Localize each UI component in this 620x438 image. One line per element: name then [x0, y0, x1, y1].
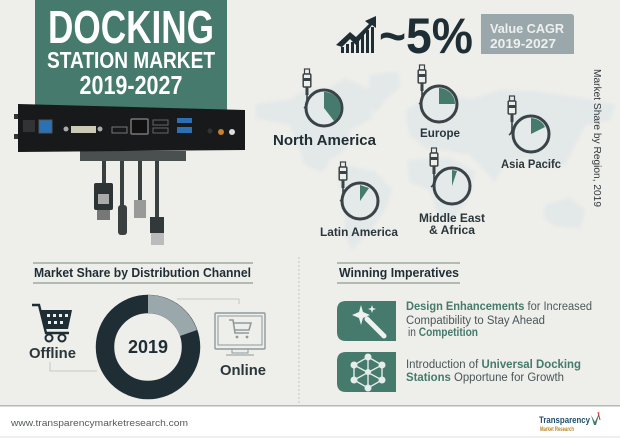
- CAGR label box: 2019-2027: [490, 37, 556, 51]
- text: design enhancements: in Competition: [408, 327, 478, 339]
- vertical dotted divider: [298, 257, 300, 403]
- CAGR label box: Value CAGR: [490, 22, 564, 36]
- heading: winning imperatives: [337, 263, 460, 283]
- website url: www.transparencymarketresearch.com: [10, 418, 188, 429]
- docking station device: [14, 104, 245, 161]
- icon tile: magic wand: [337, 301, 396, 341]
- North America pie: [273, 69, 377, 149]
- title: years: 2019-2027: [80, 70, 182, 100]
- logo: Transparency Market Research: [539, 411, 600, 433]
- connector cables: [94, 161, 164, 245]
- label: Asia Pacifc: [501, 157, 561, 171]
- Europe pie: [418, 65, 460, 140]
- leader lines: [50, 299, 239, 371]
- title: Station Market: STATION MARKET: [47, 47, 215, 73]
- text: design enhancements: Compatibility to Stay Ahead: [406, 315, 545, 327]
- side label: market share by region: Market Share by Region, 2019: [591, 69, 603, 207]
- CAGR label box: [481, 14, 574, 54]
- Asia Pacific pie: [501, 96, 561, 171]
- heading: distribution channel: Market Share by Distribution Channel: [34, 266, 251, 280]
- footer band: [0, 405, 620, 438]
- title panel: [35, 0, 227, 110]
- text: design enhancements: [406, 301, 592, 339]
- growth chart icon: [336, 16, 376, 53]
- text: design enhancements: Design Enhancements for Increased: [406, 301, 592, 313]
- logo: Transparency Market Research: Transparency: [539, 415, 591, 426]
- label: Europe: [420, 126, 460, 140]
- donut center year: 2019: [128, 337, 168, 357]
- heading: winning imperatives: Winning Imperatives: [339, 266, 459, 280]
- label: online: Online: [220, 362, 266, 379]
- icon: offline shopping cart: [32, 305, 72, 342]
- text: universal docking stations: Introduction of Universal Docking: [406, 359, 581, 371]
- Middle East and Africa pie: [419, 148, 485, 237]
- world map background: [256, 72, 615, 250]
- donut chart: [105, 295, 197, 390]
- label: Middle East: [419, 211, 485, 225]
- Middle East and Africa pie: & Africa: [429, 223, 475, 237]
- text: universal docking stations: [406, 359, 581, 384]
- label: offline: Offline: [29, 345, 76, 362]
- label: Latin America: [320, 225, 398, 239]
- label: North America: [273, 132, 377, 149]
- title: Docking: DOCKING: [48, 1, 214, 53]
- text: universal docking stations: Stations Opportune for Growth: [406, 372, 564, 384]
- CAGR value: ~5%: [379, 8, 473, 64]
- icon tile: network: [337, 352, 396, 392]
- Latin America pie: [320, 162, 398, 239]
- logo: Transparency Market Research: Market Research: [540, 427, 574, 433]
- icon: online monitor cart: [215, 313, 265, 355]
